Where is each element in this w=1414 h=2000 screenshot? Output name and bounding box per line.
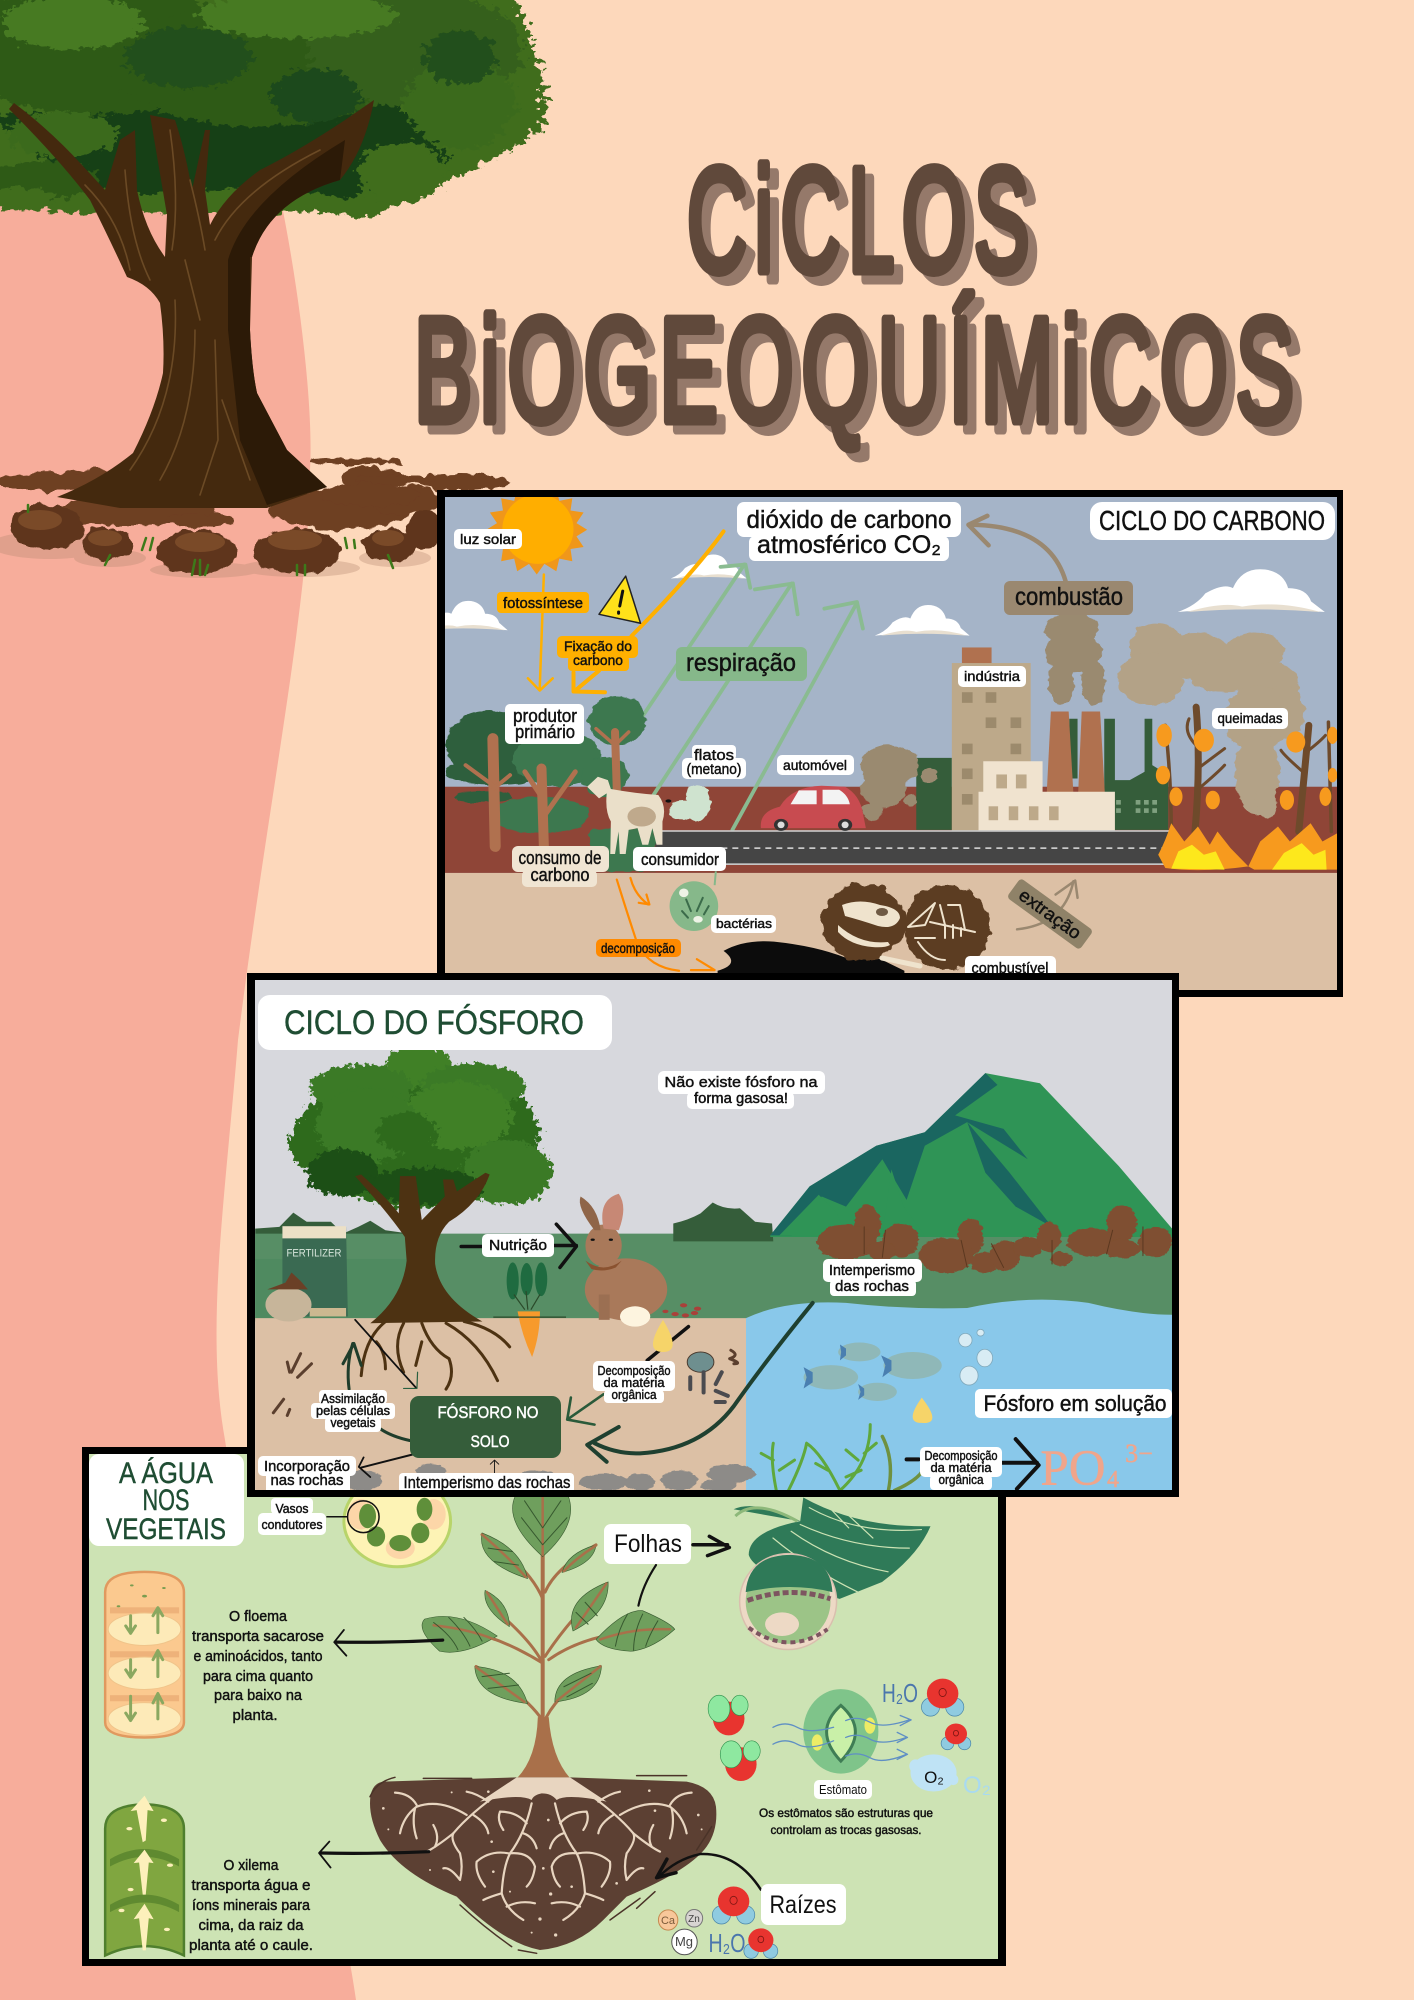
rabbit [580, 1194, 667, 1327]
arrows and leaf details [319, 1497, 971, 1958]
heading: a agua nos vegetais: A ÁGUA [119, 1457, 213, 1490]
label: respiracao: respiração [686, 649, 796, 677]
flames on trees [1156, 724, 1338, 810]
arrow: assimilacao [343, 1320, 418, 1440]
rocks [817, 1204, 1172, 1273]
fertilizer bag [265, 1226, 348, 1322]
label: incorporacao: nas rochas [270, 1472, 344, 1489]
label: consumo de carbono: carbono [530, 865, 590, 885]
label: intemperismo das rochas: das rochas [835, 1278, 909, 1295]
big leaf [734, 1497, 931, 1599]
formula: Zn: Zn [688, 1914, 700, 1925]
drop [653, 1320, 932, 1423]
label: dioxido de carbono [737, 502, 961, 561]
arrow: raizes [657, 1854, 761, 1890]
label: luz solar [454, 529, 522, 549]
label: decomposicao right: Decomposição [924, 1448, 998, 1463]
soil [255, 1318, 752, 1494]
label: nutricao [482, 1234, 554, 1257]
water [746, 1300, 1173, 1491]
label: consumo de carbono [512, 846, 609, 887]
label: combustao: combustão [1015, 583, 1123, 611]
background: pink wave shape [0, 150, 356, 2000]
label: intemperismo bottom: Intemperismo das rochas [404, 1473, 570, 1492]
text: floema [192, 1608, 324, 1724]
label: consumo de carbono: consumo de [518, 848, 602, 868]
text: floema: para cima quanto [203, 1668, 313, 1685]
trees [445, 696, 655, 871]
label: raizes [761, 1884, 846, 1925]
label: estomato: Estômato [819, 1782, 867, 1797]
minerals [658, 1909, 703, 1955]
formula: Mg: Mg [675, 1934, 693, 1949]
formula: PO4 3- [1040, 1439, 1153, 1497]
combustion arrow [968, 516, 1066, 581]
label: bacterias: bactérias [716, 916, 773, 931]
arrow: nutricao [461, 1224, 576, 1267]
goat tail [665, 799, 671, 803]
arrow: folhas [638, 1536, 729, 1606]
plant stem [434, 1496, 670, 1721]
tree trunk [9, 100, 374, 508]
text: xilema: planta até o caule. [189, 1937, 313, 1954]
tree roots [361, 1322, 510, 1389]
label: intemperismo das rochas: Intemperismo [829, 1262, 915, 1279]
label: produtor primario: produtor [513, 706, 577, 726]
label: assimilacao: vegetais [330, 1415, 376, 1430]
label: vasos condutores [258, 1498, 326, 1535]
heading: ciclo do fosforo [258, 995, 612, 1050]
xylem cylinder [105, 1796, 184, 1955]
tree front rocks [11, 504, 443, 574]
heading: ciclo do carbono [1090, 502, 1335, 540]
decomposition arrows [617, 878, 715, 971]
warning sign [599, 576, 641, 623]
sun to producer arrow [528, 575, 553, 691]
label: vasos condutores: Vasos [276, 1501, 309, 1516]
heading: a agua nos vegetais: VEGETAIS [106, 1513, 226, 1546]
fixation arrow [574, 531, 724, 692]
formula: PO4 3-: PO [1040, 1441, 1106, 1497]
rock shadows [0, 531, 431, 578]
heading: ciclo do fosforo: CICLO DO FÓSFORO [284, 1004, 584, 1042]
phloem cylinder [105, 1572, 184, 1737]
text: xilema: transporta água e [192, 1877, 310, 1894]
label: nutricao: Nutrição [489, 1237, 547, 1254]
phosphorus scenery [255, 1044, 1173, 1494]
label: industria [958, 666, 1026, 687]
text: estomatos: Os estômatos são estruturas que [759, 1806, 933, 1820]
label: fixacao do carbono: Fixação do [564, 638, 632, 654]
formula: H2O upper: H₂O [882, 1678, 918, 1708]
factory buildings [962, 647, 992, 664]
text: estomatos: controlam as trocas gasosas. [770, 1823, 922, 1837]
label: decomposicao right [920, 1447, 1002, 1490]
heading: ciclo do carbono: CICLO DO CARBONO [1099, 505, 1325, 536]
label: intemperismo das rochas [823, 1259, 922, 1296]
road [655, 831, 1171, 865]
label: decomposicao right: da matéria [930, 1460, 992, 1475]
plant leaves [422, 1496, 675, 1704]
label: dioxido de carbono: dióxido de carbono [746, 506, 952, 534]
text: floema: O floema [229, 1608, 288, 1625]
worms and organisms [273, 1350, 738, 1415]
box: fosforo no solo: FÓSFORO NO [438, 1403, 538, 1422]
goat patch [627, 807, 656, 827]
fossil: dinosaur skull [821, 884, 905, 960]
tree trunk [355, 1173, 490, 1323]
formula: H2O lower: H₂O [708, 1928, 746, 1958]
mountain [770, 1073, 1172, 1237]
text: floema: transporta sacarose [192, 1628, 324, 1645]
heading: a agua nos vegetais [89, 1454, 244, 1546]
label: assimilacao: Assimilação [321, 1391, 385, 1406]
pebbles [340, 1464, 755, 1492]
soil with roots [370, 1776, 716, 1953]
label: combustivel [965, 956, 1056, 986]
carrot [493, 1262, 566, 1357]
label: produtor primario [505, 704, 584, 744]
label: combustivel: combustível [972, 960, 1048, 977]
stomata [773, 1689, 911, 1774]
label: decomposicao da materia organica: da matéria [604, 1375, 665, 1390]
oxygen bubble [909, 1754, 958, 1792]
factory silhouette [916, 719, 1168, 830]
leaf midribs [434, 1497, 670, 1702]
note: nao existe fosforo: forma gasosa! [694, 1090, 788, 1107]
note: nao existe fosforo [658, 1071, 825, 1109]
water scenery [105, 1475, 675, 1955]
label: industria: indústria [964, 668, 1020, 684]
label: folhas [604, 1524, 691, 1564]
arrow: incorporacao [359, 1454, 415, 1477]
formula: Ca: Ca [661, 1915, 676, 1927]
text: floema: planta. [232, 1707, 278, 1724]
arrow: po4 [907, 1439, 1039, 1489]
bubbles [959, 1329, 993, 1385]
label: queimadas: queimadas [1218, 710, 1282, 726]
label: assimilacao: pelas células [316, 1403, 390, 1418]
extraction arrow [1017, 881, 1078, 929]
label: extracao [1007, 878, 1093, 950]
label: consumidor: consumidor [641, 850, 719, 869]
carbon cycle scenery [418, 485, 1338, 992]
text: floema: e aminoácidos, tanto [194, 1648, 322, 1665]
label: extracao: extração [1015, 885, 1085, 943]
text: xilema: íons minerais para [192, 1897, 311, 1914]
formula: PO4 3-: 4 [1107, 1467, 1119, 1493]
label: fixacao do carbono: carbono [573, 652, 623, 668]
tree canopy [0, 0, 545, 220]
label: folhas: Folhas [614, 1530, 682, 1558]
label: incorporacao [258, 1456, 356, 1490]
bacteria [670, 871, 718, 931]
formula: O2 in bubble: O₂ [924, 1768, 944, 1787]
burnt trees [1165, 707, 1331, 831]
arrow: floema [334, 1630, 443, 1656]
tree canopy [288, 1044, 552, 1208]
fossil: skeleton [904, 885, 990, 969]
trunk bark streaks [85, 130, 320, 495]
label: fotossintese: fotossíntese [503, 595, 583, 612]
panel: ciclo do fosforo [247, 973, 1179, 1497]
arrow: xilema [319, 1842, 429, 1868]
label: decomposicao da materia organica: Decomposição [598, 1363, 670, 1378]
box: fosforo no solo [410, 1396, 561, 1458]
arrow: intemperismo [490, 1460, 499, 1491]
respiration arrows [638, 565, 863, 830]
smoke [1118, 623, 1305, 818]
arrow: decomposicao [647, 1327, 688, 1360]
text: xilema: O xilema [224, 1857, 279, 1874]
label: dioxido de carbono: atmosférico CO₂ [757, 531, 941, 559]
fish [804, 1342, 942, 1401]
formula: PO4 3-: 3− [1125, 1439, 1153, 1468]
heading: a agua nos vegetais: NOS [142, 1484, 190, 1517]
label: bacterias [711, 915, 776, 933]
droppings [662, 1303, 701, 1317]
panel: a agua nos vegetais [82, 1447, 1006, 1966]
label: automovel: automóvel [783, 757, 847, 773]
text: xilema [189, 1857, 313, 1954]
title [414, 138, 1302, 453]
fertilizer word: FERTILIZER [286, 1248, 341, 1260]
formula: O2 outer: O₂ [963, 1772, 991, 1799]
illustration: large tree [0, 0, 545, 578]
ground fire [1158, 823, 1337, 870]
text: estomatos [759, 1806, 933, 1837]
text: xilema: cima, da raiz da [198, 1917, 304, 1934]
flatulence cloud [669, 785, 710, 822]
label: decomposicao da materia organica [593, 1361, 675, 1403]
label: incorporacao: Incorporação [264, 1458, 350, 1475]
text: floema: para baixo na [214, 1687, 303, 1704]
panel: ciclo do carbono [418, 485, 1343, 997]
goat [587, 777, 664, 854]
grass tufts [28, 505, 393, 575]
label: assimilacao [311, 1390, 395, 1432]
oil [718, 941, 904, 973]
car [761, 786, 866, 831]
title: CiCLOS [687, 138, 1037, 303]
label: automovel [777, 755, 854, 775]
label: flatos: flatos [694, 747, 734, 764]
label: decomposicao da materia organica: orgânica [612, 1387, 657, 1402]
river arrow [587, 1303, 813, 1462]
tree back rocks [0, 457, 508, 530]
label: queimadas [1212, 708, 1288, 729]
leaf cross-section [740, 1554, 837, 1650]
label: vasos condutores: condutores [262, 1517, 323, 1532]
label: raizes: Raízes [770, 1891, 836, 1919]
note: nao existe fosforo: Não existe fósforo na [664, 1074, 818, 1091]
label: produtor primario: primário [515, 722, 575, 742]
label: luz solar: luz solar [460, 531, 516, 547]
label: flatos [682, 745, 746, 779]
stem cross-section [326, 1475, 451, 1567]
box: fosforo no solo: SOLO [470, 1432, 510, 1451]
molecules [708, 1695, 748, 1735]
label: flatos: (metano) [686, 761, 742, 778]
label: decomposicao right: orgânica [938, 1472, 984, 1487]
hills [255, 1213, 410, 1261]
label: fosforo em solucao: Fósforo em solução [984, 1391, 1166, 1416]
fossil bone [882, 958, 920, 966]
label: fixacao do carbono [557, 636, 638, 671]
water plants [761, 1425, 876, 1491]
label: decomposicao: decomposição [601, 940, 675, 956]
